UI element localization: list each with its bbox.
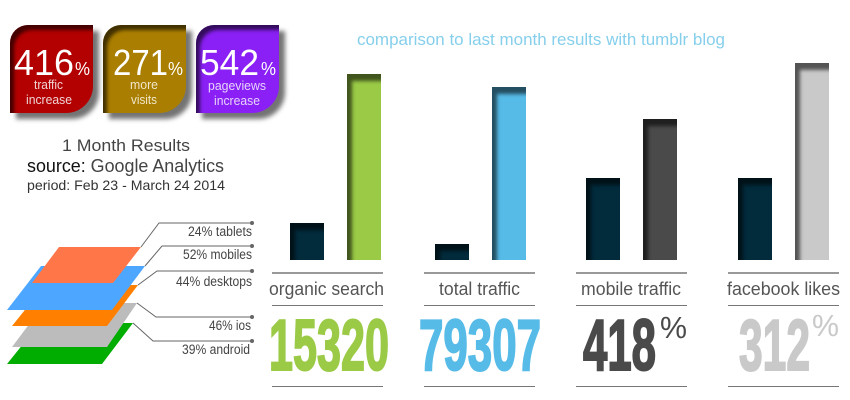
label: mobile traffic: mobile traffic <box>581 279 681 299</box>
stat card: more visits: more <box>130 77 158 92</box>
stat card: traffic increase <box>10 25 93 113</box>
stat card: pageviews increase: % <box>261 59 276 79</box>
label: total traffic: total traffic <box>439 279 520 299</box>
results caption: period: Feb 23 - March 24 2014 <box>27 177 225 193</box>
stat card: pageviews increase: increase <box>214 93 260 108</box>
results caption: source: Google Analytics <box>27 156 224 176</box>
layer: mobiles <box>7 266 145 310</box>
results caption <box>27 136 225 193</box>
label: organic search: organic search <box>269 279 384 299</box>
value: 312%: % <box>812 308 839 343</box>
callout: tablets: 24% tablets <box>188 224 252 239</box>
bar chart: mobile traffic <box>586 119 677 260</box>
stat card: traffic increase: traffic <box>34 77 63 92</box>
value: 418%: 418 <box>583 306 656 386</box>
stat card: pageviews increase <box>196 25 279 113</box>
stat card: pageviews increase: 542 <box>200 42 259 83</box>
layer: ios <box>12 303 137 347</box>
stat card: more visits: % <box>168 59 183 79</box>
stat card: traffic increase: % <box>75 59 90 79</box>
callout: desktops: 44% desktops <box>176 274 252 289</box>
stat card: traffic increase: increase <box>26 92 72 107</box>
value: 15320: 15320 <box>269 306 389 386</box>
callout: ios: 46% ios <box>209 318 251 333</box>
panel: mobile traffic <box>576 119 687 387</box>
layer: tablets <box>32 247 141 283</box>
callout: mobiles: 52% mobiles <box>183 247 252 262</box>
stat card: more visits: visits <box>131 92 157 107</box>
stat card: pageviews increase: pageviews <box>208 78 266 93</box>
panel: organic search <box>269 74 389 387</box>
stat card: more visits <box>103 25 186 113</box>
bar chart: organic search <box>290 74 381 260</box>
layer: android <box>7 323 133 364</box>
results caption: 1 Month Results <box>62 136 190 155</box>
value: 79307: 79307 <box>419 306 541 386</box>
bar chart: total traffic <box>435 87 526 260</box>
value: 418%: % <box>660 310 687 345</box>
layer callouts <box>133 221 254 357</box>
panel: total traffic <box>419 87 541 387</box>
bar chart: facebook likes <box>738 63 829 260</box>
stat card: more visits: 271 <box>113 42 168 83</box>
chart title: comparison to last month results with tumblr blog <box>357 30 725 49</box>
stat card: traffic increase: 416 <box>14 42 74 83</box>
label: facebook likes: facebook likes <box>727 279 840 299</box>
callout: android: 39% android <box>182 342 250 357</box>
panel: facebook likes <box>727 63 840 387</box>
stacked layers diagram <box>7 247 145 364</box>
layer: desktops <box>12 285 138 326</box>
